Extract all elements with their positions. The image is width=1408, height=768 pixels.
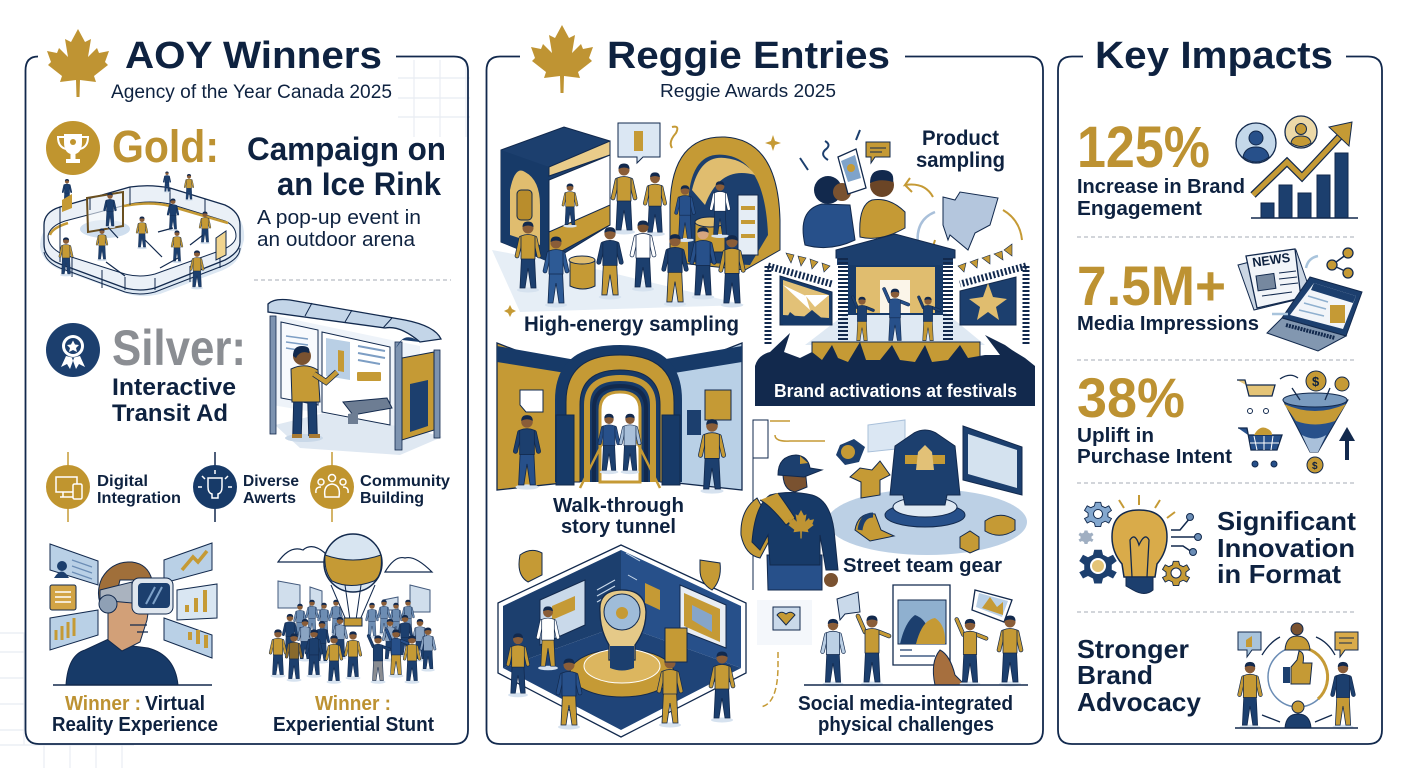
heading: Gold: Gold: — [112, 121, 219, 172]
feature: Diverse Awerts — [193, 452, 299, 522]
feature: Diverse Awerts: Awerts — [243, 490, 296, 507]
label: social media-integrated physical challenges — [798, 693, 1013, 736]
background grid: bottom left corner — [0, 633, 134, 768]
feature: Digital Integration: Integration — [97, 490, 181, 507]
stat: 125%: Increase in Brand — [1077, 176, 1245, 198]
stat: 7.5M+: 7.5M+ — [1077, 254, 1226, 317]
stat: 7.5M+: Media Impressions — [1077, 313, 1259, 335]
text: stronger brand advocacy: Brand — [1077, 660, 1153, 690]
illustration: innovation room — [498, 545, 746, 737]
stat: 125% — [1077, 115, 1245, 220]
description: pop-up event: an outdoor arena — [257, 228, 416, 251]
caption: VR winner: Reality Experience — [52, 714, 218, 736]
label: high-energy sampling: High-energy sampling — [524, 313, 739, 336]
label: street team gear: Street team gear — [843, 555, 1002, 577]
feature: Community Building: Community — [360, 473, 450, 490]
panel: Reggie Entries — [486, 25, 1043, 744]
subtitle: Reggie Awards 2025 — [660, 81, 836, 101]
icon: light bulb and gears — [1078, 495, 1202, 594]
feature: Digital Integration — [46, 452, 181, 522]
description: pop-up event: A pop-up event in — [257, 206, 421, 229]
background grid: top right of first panel — [398, 60, 470, 137]
label: walk-through story tunnel: Walk-through — [553, 495, 684, 517]
stat: 125%: Engagement — [1077, 198, 1202, 220]
panel: AOY Winners — [26, 29, 468, 744]
icon: gold trophy — [46, 121, 100, 175]
stat: 38% — [1077, 366, 1232, 468]
icon: carts and funnel: $ — [1312, 461, 1318, 472]
text: significant innovation: in Format — [1217, 559, 1341, 589]
panel: Key Impacts — [1058, 35, 1382, 744]
stat: 38%: Uplift in — [1077, 425, 1154, 447]
heading: Interactive Transit Ad: Interactive — [112, 374, 236, 401]
icon: maple leaf — [47, 29, 109, 97]
title: AOY Winners — [125, 35, 382, 77]
subtitle: Agency of the Year Canada 2025 — [111, 82, 392, 103]
icon: advocacy cycle — [1235, 623, 1358, 729]
illustration: bus shelter — [268, 300, 442, 455]
caption: stunt winner: Experiential Stunt — [273, 714, 434, 736]
banner: brand activations — [755, 376, 1035, 406]
heading: Campaign on an Ice Rink — [247, 131, 446, 202]
text: significant innovation — [1217, 506, 1356, 589]
stat: 38%: Purchase Intent — [1077, 446, 1232, 468]
heading: Campaign on an Ice Rink: an Ice Rink — [277, 166, 441, 202]
illustration: ice rink — [40, 171, 244, 296]
text: stronger brand advocacy: Stronger — [1077, 634, 1189, 664]
heading: Campaign on an Ice Rink: Campaign on — [247, 131, 446, 167]
illustration: walk-through tunnel — [497, 343, 742, 494]
title: Reggie Entries — [607, 35, 890, 77]
caption: VR winner: Winner : — [65, 693, 141, 715]
label: product sampling: Product — [922, 127, 999, 150]
illustration: balloon stunt — [271, 534, 435, 684]
stat: 125%: 125% — [1077, 115, 1210, 180]
illustration: festival stage — [755, 234, 1035, 378]
caption: VR winner: Virtual — [145, 693, 205, 715]
label: social media-integrated physical challenges: Social media-integrated — [798, 693, 1013, 715]
text: significant innovation: Innovation — [1217, 533, 1355, 563]
panel frame — [1058, 56, 1382, 744]
illustration: street team gear — [741, 420, 1027, 590]
icon: carts and funnel — [1237, 371, 1355, 473]
label: walk-through story tunnel: story tunnel — [561, 516, 676, 538]
panel frame — [26, 56, 468, 744]
text: significant innovation: Significant — [1217, 506, 1356, 536]
feature: Community Building — [310, 452, 450, 522]
caption: stunt winner — [273, 693, 434, 736]
icon: newspaper, laptop and share — [1238, 248, 1362, 351]
panel frame — [486, 56, 1043, 744]
banner: brand activations: Brand activations at festivals — [774, 381, 1017, 401]
description: pop-up event — [257, 206, 421, 251]
illustration: social media challenges — [757, 585, 1028, 707]
label: social media-integrated physical challenges: physical challenges — [818, 714, 994, 736]
icon: carts and funnel: $ — [1312, 374, 1320, 389]
feature: Digital Integration: Digital — [97, 473, 148, 490]
icon: silver ribbon — [46, 323, 100, 377]
label: product sampling — [916, 127, 1005, 172]
illustration: high-energy sampling booth — [492, 123, 781, 317]
chart: growth bars and arrow — [1236, 116, 1358, 218]
stat: 38%: 38% — [1077, 366, 1185, 429]
feature: Diverse Awerts: Diverse — [243, 473, 299, 490]
icon: maple leaf — [531, 25, 593, 93]
label: walk-through story tunnel — [553, 495, 684, 538]
heading: Interactive Transit Ad: Transit Ad — [112, 400, 228, 427]
illustration: virtual reality — [50, 543, 217, 685]
illustration: product sampling — [800, 130, 1022, 250]
text: stronger brand advocacy — [1077, 634, 1202, 717]
text: stronger brand advocacy: Advocacy — [1077, 687, 1202, 717]
feature: Community Building: Building — [360, 490, 424, 507]
stat: 7.5M+ — [1077, 254, 1259, 335]
label: product sampling: sampling — [916, 149, 1005, 172]
heading: Silver: Silver: — [112, 320, 246, 376]
caption: stunt winner: Winner : — [315, 693, 391, 715]
caption: VR winner — [52, 693, 218, 736]
icon: newspaper, laptop and share: NEWS — [1251, 250, 1291, 270]
heading: Interactive Transit Ad — [112, 374, 236, 427]
title: Key Impacts — [1095, 35, 1333, 77]
